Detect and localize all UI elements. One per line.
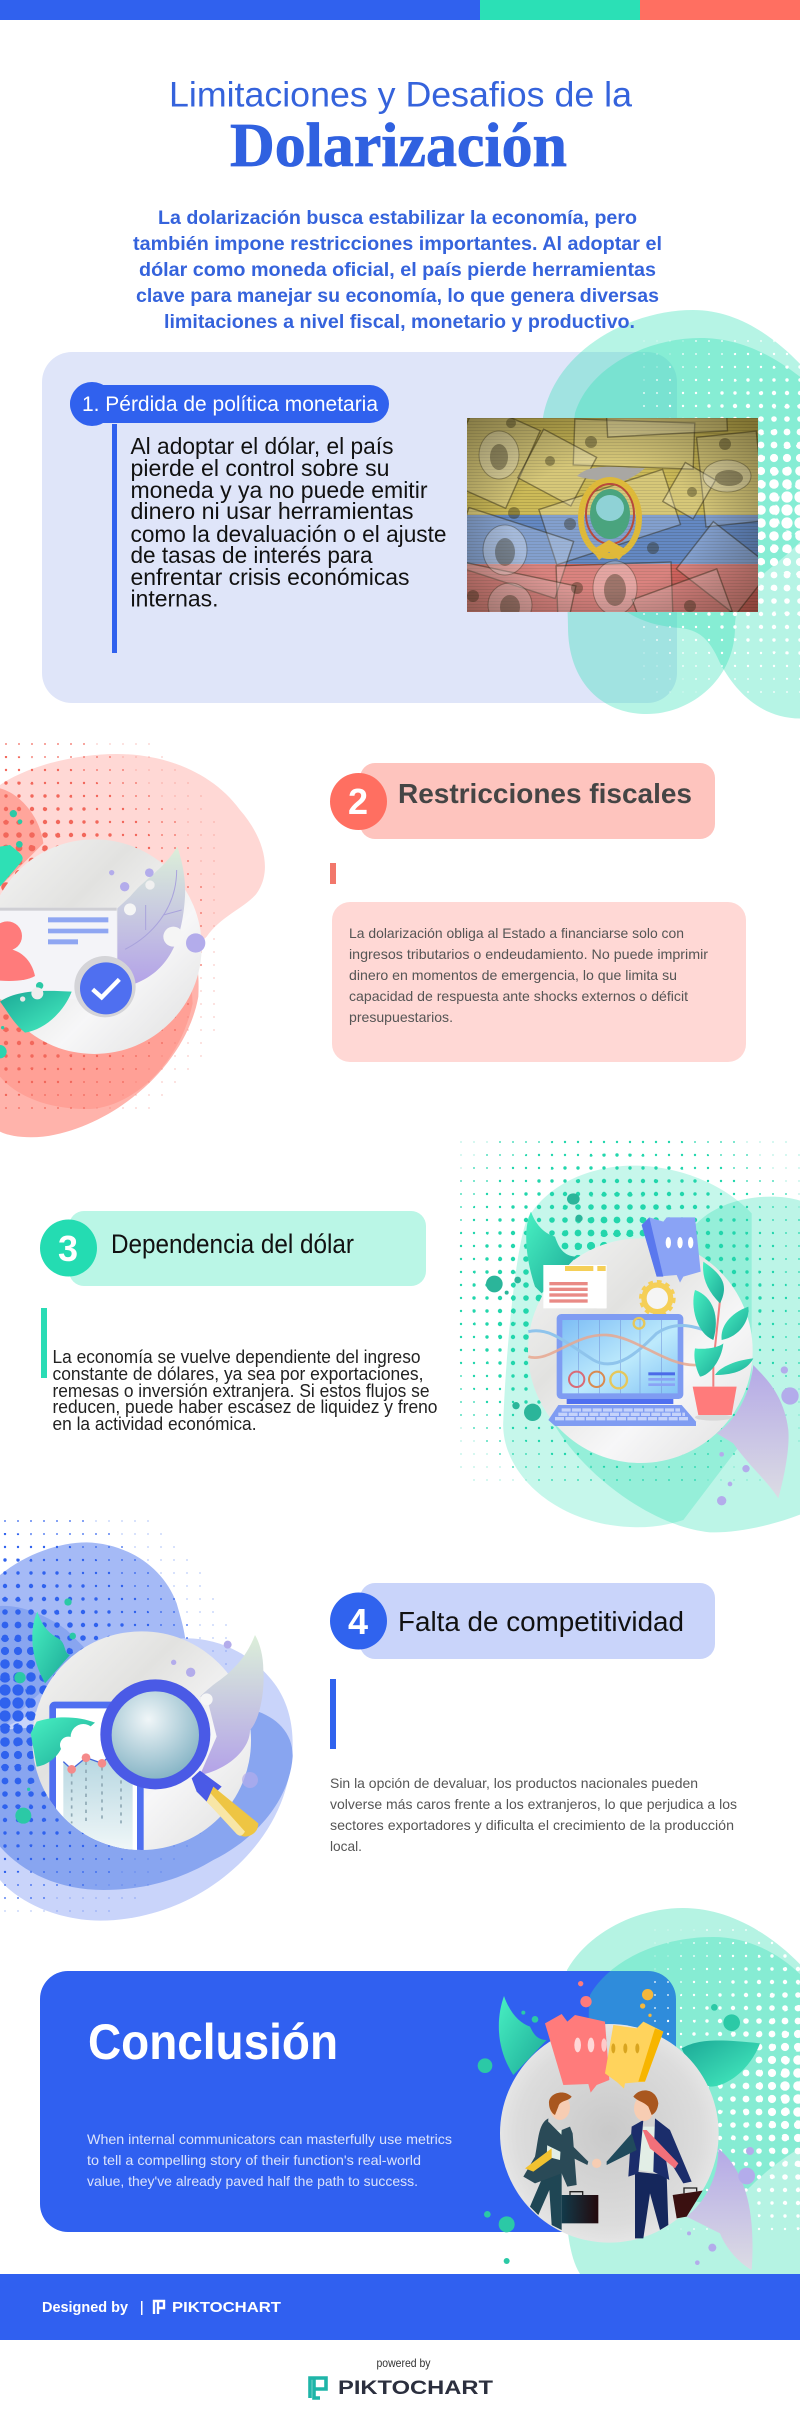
section 3 body text: La economía se vuelve dependiente del ingreso bbox=[52, 1347, 420, 1367]
section 1 heading pill: 1. Pérdida de política monetaria bbox=[82, 393, 378, 416]
footer band bbox=[0, 2274, 800, 2340]
section 2 text box: presupuestarios. bbox=[349, 1009, 453, 1025]
panel: perdida de politica monetaria background bbox=[42, 352, 677, 703]
section 4 heading bbox=[330, 1583, 715, 1659]
intro text: dólar como moneda oficial, el país pierde herramientas bbox=[139, 260, 656, 281]
section 1 body text: de tasas de interés para bbox=[130, 542, 373, 568]
illustration: handshake bbox=[478, 1981, 760, 2270]
section 2 text box: La dolarización obliga al Estado a financiarse solo con bbox=[349, 925, 684, 941]
section 4 body text: sectores exportadores y dificulta el crecimiento de la producción bbox=[330, 1817, 734, 1833]
powered by Piktochart logo: powered by bbox=[376, 2356, 430, 2370]
figure: right businessman bbox=[607, 2090, 703, 2238]
intro text: La dolarización busca estabilizar la economía, pero bbox=[158, 208, 637, 229]
section 1 body text: Al adoptar el dólar, el país bbox=[130, 433, 394, 459]
intro text: también impone restricciones importantes. Al adoptar el bbox=[133, 234, 662, 255]
panel: conclusion: Conclusión bbox=[88, 2014, 338, 2070]
section 3 heading bbox=[40, 1211, 426, 1286]
section 4 heading: Falta de competitividad bbox=[398, 1606, 684, 1637]
section 4 heading: 4 bbox=[348, 1601, 368, 1642]
illustration: laptop on teal blobs bbox=[455, 1136, 800, 1532]
section 1 accent bar bbox=[112, 424, 117, 653]
section 4 accent bar bbox=[330, 1679, 336, 1749]
emblem bbox=[577, 467, 645, 484]
powered by Piktochart logo: PIKTOCHART bbox=[338, 2378, 493, 2399]
figure: left businessman bbox=[523, 2092, 598, 2230]
section 2 heading: Restricciones fiscales bbox=[398, 778, 692, 809]
section 1 body text: dinero ni usar herramientas bbox=[130, 498, 414, 524]
section 3 body text: reducen, puede haber escasez de liquidez y freno bbox=[52, 1397, 438, 1417]
photo: Ecuador flag over dollar bills bbox=[467, 418, 758, 612]
halftone dots section 1 bbox=[640, 340, 800, 700]
title bbox=[169, 76, 633, 180]
illustration: magnifier on blue blobs bbox=[0, 1518, 293, 1921]
panel: conclusion: When internal communicators can masterfully use metrics bbox=[87, 2131, 452, 2147]
section 3 body text: constante de dólares, ya sea por exportaciones, bbox=[52, 1364, 424, 1384]
teal blobs behind section 1 bbox=[543, 310, 800, 718]
intro text bbox=[133, 208, 662, 333]
section 1 body text: enfrentar crisis económicas bbox=[130, 564, 410, 590]
section 2 text box: dinero en momentos de emergencia, lo que limita su bbox=[349, 967, 677, 983]
section 2 heading bbox=[330, 763, 715, 839]
halftone dots conclusion bbox=[650, 1925, 800, 2240]
section 2 heading: 2 bbox=[348, 781, 368, 822]
section 4 body text: volverse más caros frente a los extranjeros, lo que perjudica a los bbox=[330, 1796, 737, 1812]
section 3 body text: remesas o inversión extranjera. Si estos flujos se bbox=[52, 1381, 430, 1401]
section 2 text box: ingresos tributarios o endeudamiento. No puede imprimir bbox=[349, 946, 708, 962]
light teal blob behind conclusion bbox=[566, 1908, 800, 2274]
section 1 body text: internas. bbox=[130, 586, 218, 612]
darker teal blob over conclusion bbox=[589, 1937, 800, 2203]
section 2 text box: capacidad de respuesta ante shocks externos o déficit bbox=[349, 988, 688, 1004]
dollar bills layer bbox=[467, 418, 758, 612]
intro text: limitaciones a nivel fiscal, monetario y productivo. bbox=[164, 312, 635, 333]
portraits and seals bbox=[479, 431, 751, 627]
section 2 text box bbox=[332, 902, 746, 1062]
top colour bar bbox=[0, 0, 800, 20]
section 1 body text: moneda y ya no puede emitir bbox=[130, 477, 428, 503]
title: Limitaciones y Desafios de la bbox=[169, 76, 633, 114]
footer band: PIKTOCHART bbox=[172, 2299, 281, 2316]
panel: conclusion: to tell a compelling story of their function's real-world bbox=[87, 2152, 421, 2168]
section 3 body text bbox=[52, 1347, 438, 1434]
panel: conclusion: value, they've already paved half the path to success. bbox=[87, 2173, 418, 2189]
intro text: clave para manejar su economía, lo que genera diversas bbox=[136, 286, 659, 307]
section 4 body text bbox=[330, 1775, 737, 1854]
title: Dolarización bbox=[230, 112, 567, 180]
section 1 heading pill bbox=[70, 382, 389, 426]
footer band: Designed by bbox=[42, 2299, 129, 2316]
section 2 accent bar bbox=[330, 863, 336, 884]
section 1 body text: como la devaluación o el ajuste bbox=[130, 521, 446, 547]
powered by Piktochart logo bbox=[310, 2356, 493, 2399]
section 4 body text: Sin la opción de devaluar, los productos nacionales pueden bbox=[330, 1775, 698, 1791]
decorative particles bbox=[478, 1981, 755, 2265]
section 3 accent bar bbox=[41, 1308, 47, 1378]
section 3 heading: Dependencia del dólar bbox=[111, 1229, 354, 1259]
section 1 body text bbox=[130, 433, 446, 612]
section 1 body text: pierde el control sobre su bbox=[130, 455, 390, 481]
panel: conclusion bbox=[40, 1971, 676, 2232]
section 3 body text: en la actividad económica. bbox=[52, 1414, 256, 1434]
section 4 body text: local. bbox=[330, 1838, 362, 1854]
section 3 heading: 3 bbox=[58, 1228, 78, 1269]
illustration: fiscal card on coral blobs bbox=[0, 736, 265, 1137]
